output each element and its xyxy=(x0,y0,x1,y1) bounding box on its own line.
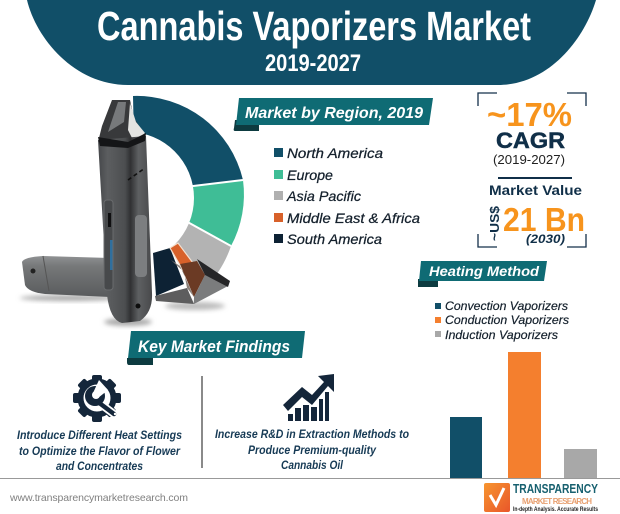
legend: heating method xyxy=(435,299,569,342)
label: Heating Method xyxy=(418,261,547,287)
bar chart: heating method xyxy=(450,352,597,478)
icon: rising bar chart with arrow xyxy=(283,374,334,421)
logo: Transparency Market Research xyxy=(484,481,598,513)
legend: regions: Europe xyxy=(287,167,333,183)
market value number: 21 Bn xyxy=(503,201,585,238)
label: Market by Region xyxy=(234,98,433,131)
market value year: (2030) xyxy=(526,232,565,246)
legend: regions: Asia Pacific xyxy=(286,188,361,204)
label: Market by Region: Market by Region, 2019 xyxy=(245,105,423,122)
CAGR period: (2019-2027) xyxy=(493,152,565,167)
title banner xyxy=(27,0,596,85)
legend: heating method: Conduction Vaporizers xyxy=(445,313,569,327)
label: Key Market Findings xyxy=(127,331,305,365)
donut chart: market by region xyxy=(62,96,244,296)
finding text: R&D: Cannabis Oil xyxy=(281,458,344,472)
finding text: R&D: Increase R&D in Extraction Methods to xyxy=(215,427,409,441)
legend: heating method: Induction Vaporizers xyxy=(445,328,558,342)
CAGR value: ~17% xyxy=(487,96,572,133)
legend: regions xyxy=(274,145,420,247)
market value prefix: ~US$ xyxy=(487,205,502,241)
legend: regions: North America xyxy=(287,145,383,161)
logo: Transparency Market Research: MARKET RESEARCH xyxy=(522,497,592,506)
finding text: heat settings: Introduce Different Heat Settings xyxy=(17,428,182,442)
website url: www.transparencymarketresearch.com xyxy=(9,492,188,504)
legend: heating method: Convection Vaporizers xyxy=(445,299,568,313)
finding text: R&D: Produce Premium-quality xyxy=(248,443,377,457)
CAGR label: CAGR xyxy=(496,128,565,153)
stats panel: CAGR and market value xyxy=(478,93,586,247)
icon: gear and wrench xyxy=(73,375,121,422)
legend: regions: South America xyxy=(287,231,382,247)
subtitle: 2019-2027 xyxy=(265,50,361,77)
finding text: heat settings xyxy=(17,428,182,473)
finding text: R&D xyxy=(215,427,409,472)
finding text: heat settings: to Optimize the Flavor of Flower xyxy=(19,444,181,458)
logo: Transparency Market Research: TRANSPARENCY xyxy=(513,481,598,496)
finding text: heat settings: and Concentrates xyxy=(56,459,143,473)
market value label: Market Value xyxy=(489,182,582,198)
vaporizer device image xyxy=(20,100,230,326)
label: Key Market Findings: Key Market Findings xyxy=(138,337,290,356)
label: Heating Method: Heating Method xyxy=(429,263,539,279)
legend: regions: Middle East & Africa xyxy=(287,210,420,226)
